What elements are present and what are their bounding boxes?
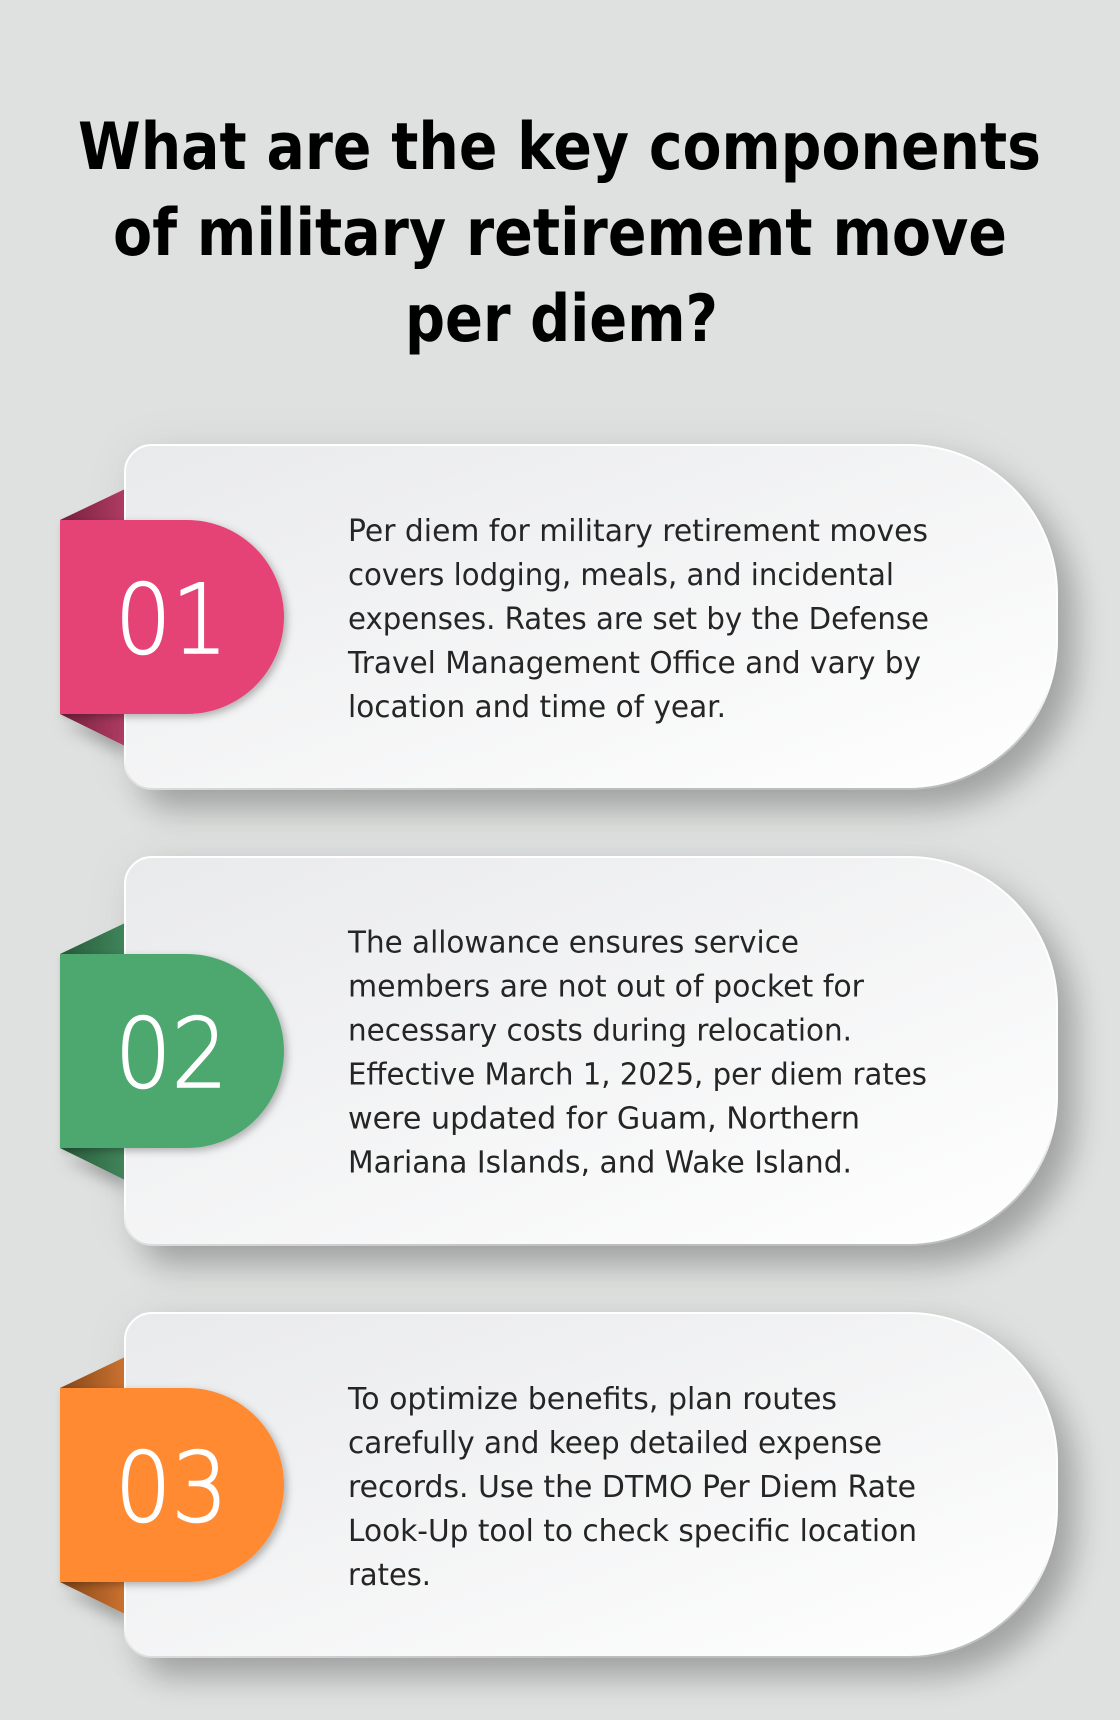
number badge 03 <box>60 1388 284 1582</box>
text block 03: carefully and keep detailed expense <box>348 1426 882 1461</box>
text block 03 <box>347 1382 917 1593</box>
card 01 <box>125 445 1057 789</box>
text block 03: To optimize benefits, plan routes <box>347 1382 837 1417</box>
text block 02: necessary costs during relocation. <box>348 1014 852 1048</box>
title: per diem? <box>405 282 718 357</box>
text block 02: members are not out of pocket for <box>348 970 865 1004</box>
icon: ribbon folds 03 <box>60 1357 125 1614</box>
card 02 <box>125 857 1057 1245</box>
icon: ribbon folds 02 <box>60 923 125 1180</box>
panel: step 01 <box>60 445 1075 809</box>
number badge 01 <box>60 520 284 714</box>
title: of military retirement move <box>113 196 1007 271</box>
number badge 03: 03 <box>115 1432 228 1544</box>
text block 02: Effective March 1, 2025, per diem rates <box>348 1058 927 1092</box>
text block 01: covers lodging, meals, and incidental <box>348 558 894 593</box>
panel: step 03 <box>60 1313 1075 1677</box>
text block 02 <box>347 926 927 1180</box>
text block 01 <box>347 514 929 725</box>
title <box>78 110 1041 357</box>
icon: ribbon folds 01 <box>60 489 125 746</box>
text block 01: location and time of year. <box>348 690 726 725</box>
text block 03: Look-Up tool to check specific location <box>348 1514 917 1549</box>
text block 02: were updated for Guam, Northern <box>348 1102 860 1136</box>
number badge 02: 02 <box>115 998 228 1110</box>
text block 01: Per diem for military retirement moves <box>348 514 928 549</box>
text block 01: Travel Management Office and vary by <box>347 646 921 681</box>
text block 03: rates. <box>348 1558 431 1593</box>
text block 02: The allowance ensures service <box>347 926 799 960</box>
number badge 01: 01 <box>115 564 228 676</box>
text block 03: records. Use the DTMO Per Diem Rate <box>348 1470 916 1505</box>
number badge 02 <box>60 954 284 1148</box>
card 03 <box>125 1313 1057 1657</box>
text block 01: expenses. Rates are set by the Defense <box>348 602 929 637</box>
text block 02: Mariana Islands, and Wake Island. <box>348 1146 852 1180</box>
panel: step 02 <box>60 857 1075 1265</box>
